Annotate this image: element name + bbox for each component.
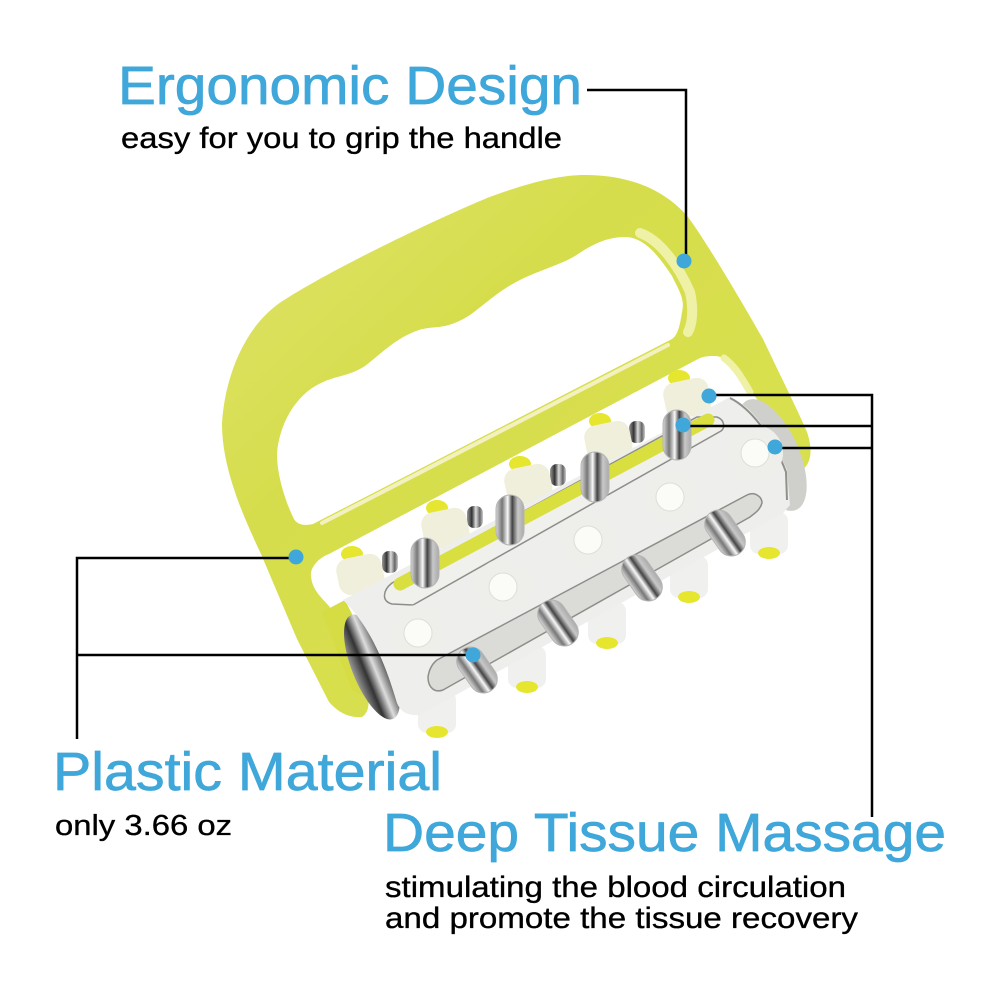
heading: Plastic Material: Plastic Material [53, 742, 442, 802]
upper slot yellow strip [400, 420, 708, 584]
bumps [390, 605, 446, 661]
text: grip caption: easy for you to grip the handle [121, 122, 562, 155]
handle [222, 175, 811, 717]
left cap chrome [332, 608, 412, 726]
left cap yellow [322, 600, 372, 700]
callout dots [288, 254, 782, 662]
lower slot [428, 494, 762, 691]
heading: Deep Tissue Massage: Deep Tissue Massage [383, 803, 946, 863]
text: massage caption: stimulating the blood circulation [385, 871, 846, 904]
text: massage caption: and promote the tissue recovery [385, 902, 858, 935]
right end ring [730, 398, 787, 500]
far knobs and stubs [382, 551, 398, 573]
text: weight caption: only 3.66 oz [55, 810, 232, 842]
near knobs [418, 691, 456, 738]
handle inner highlight [322, 233, 750, 523]
leader lines [77, 90, 872, 817]
upper chrome pins [411, 538, 439, 588]
heading: Ergonomic Design: Ergonomic Design [118, 56, 582, 116]
roller body [343, 397, 790, 715]
product: massage roller [222, 175, 821, 738]
lower chrome pins [451, 641, 503, 699]
text: massage caption [385, 871, 858, 935]
right cap [723, 389, 821, 521]
upper slot [384, 417, 724, 605]
